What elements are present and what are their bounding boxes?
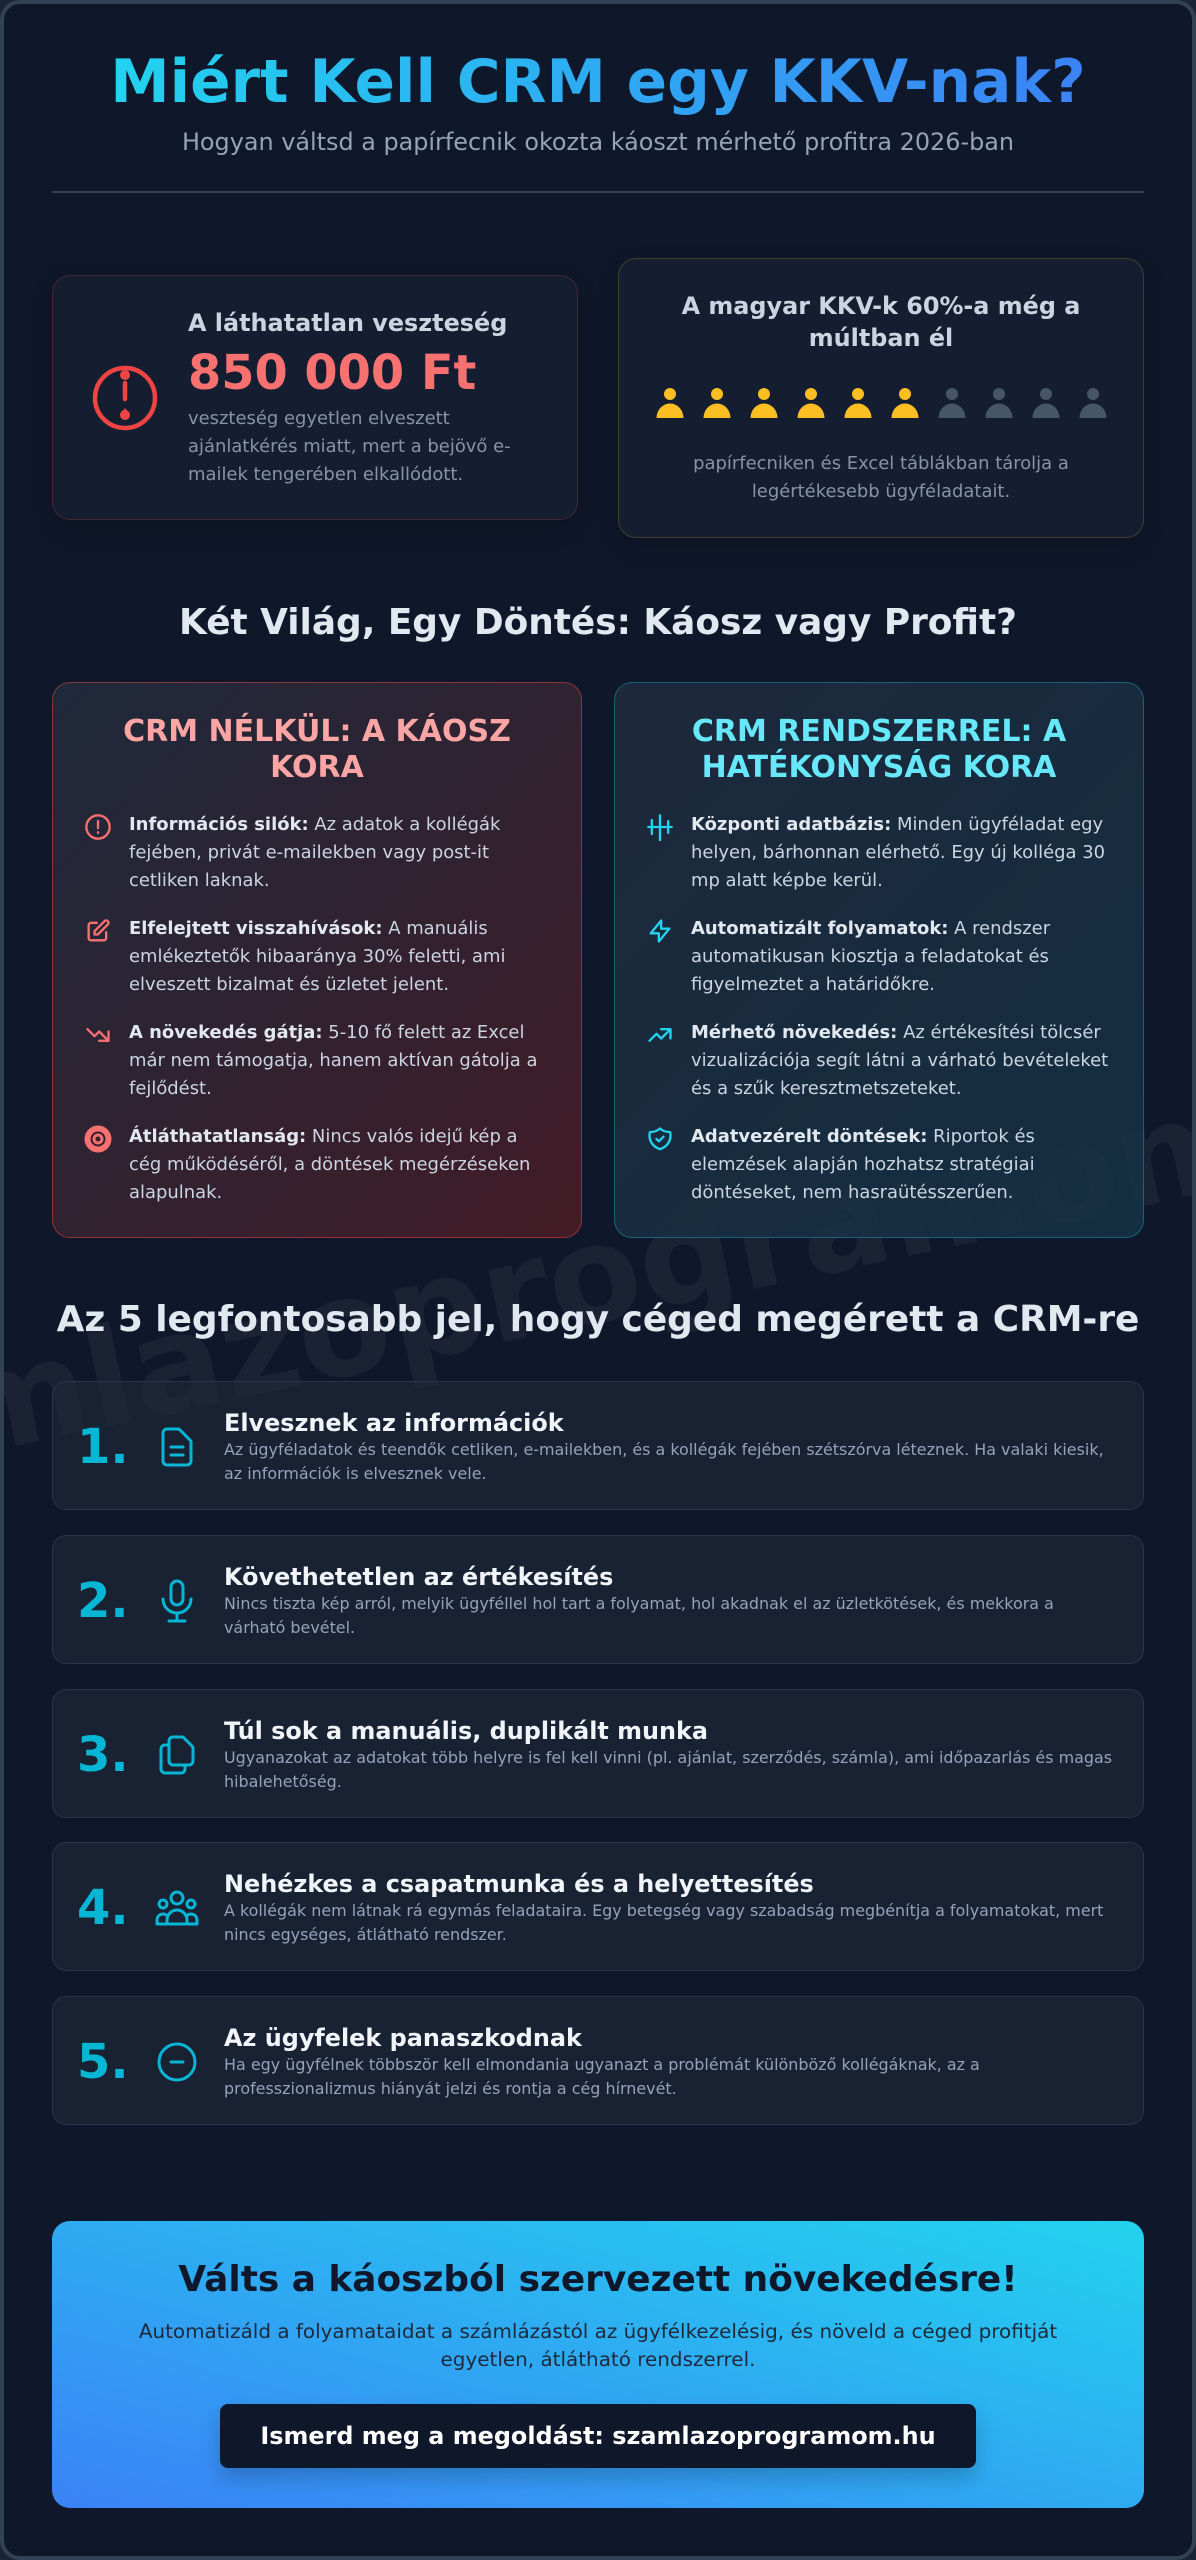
CTA text: Automatizáld a folyamataidat a számlázástól az ügyfélkezelésig, és növeld a céged profitját (139, 2319, 1057, 2343)
stat description (693, 453, 1069, 502)
sign title: Nehézkes a csapatmunka és a helyettesítés (224, 1870, 814, 1898)
item: automation (650, 918, 1050, 995)
panel heading: CRM RENDSZERREL: A (692, 714, 1066, 749)
item: silos (85, 814, 500, 891)
item text (691, 814, 1105, 891)
item text (691, 1126, 1035, 1203)
item text: cég működéséről, a döntések megérzéseken (129, 1154, 530, 1175)
stat description (188, 408, 511, 485)
item text: Információs silók: Az adatok a kollégák (129, 814, 500, 835)
item text: Mérhető növekedés: Az értékesítési tölcsér (691, 1022, 1101, 1043)
item text: figyelmeztet a határidőkre. (691, 974, 935, 995)
item text (691, 1022, 1108, 1099)
sign card 1 (52, 1381, 1144, 1510)
stat description: mailek tengerében elkallódott. (188, 464, 463, 485)
panel heading (123, 712, 511, 785)
item: central database (647, 814, 1105, 891)
sign card 5 (52, 1996, 1144, 2125)
stat heading (682, 292, 1080, 352)
sign description: professzionalizmus hiányát jelzi és rontja a cég hírnevét. (224, 2079, 677, 2098)
sign description: Ugyanazokat az adatokat több helyre is fel kell vinni (pl. ajánlat, szerződés, számla), ami időpazarlás és magas (224, 1748, 1112, 1767)
icon: microphone (162, 1580, 192, 1622)
sign description (224, 1748, 1112, 1791)
item text: Elfelejtett visszahívások: A manuális (129, 918, 488, 939)
stat description: ajánlatkérés miatt, mert a bejövő e- (188, 436, 511, 457)
section heading: five signs: Az 5 legfontosabb jel, hogy céged megérett a CRM-re (57, 1299, 1139, 1340)
item: measurable growth (648, 1022, 1108, 1099)
CTA heading: Válts a káoszból szervezett növekedésre! (178, 2259, 1018, 2300)
icon: team (156, 1890, 198, 1926)
item text (129, 1126, 530, 1203)
item text (129, 918, 506, 995)
icon: exclamation circle (85, 814, 111, 840)
stat value: 850 000 Ft (188, 346, 476, 401)
sign description (224, 1594, 1054, 1637)
item text: fejlődést. (129, 1078, 212, 1099)
item text: elemzések alapján hozhatsz stratégiai (691, 1154, 1035, 1175)
icon: minus circle (152, 2038, 200, 2086)
sign description: várható bevétel. (224, 1618, 355, 1637)
item text: Adatvezérelt döntések: Riportok és (691, 1126, 1035, 1147)
icon: target (84, 1126, 112, 1152)
icon: pencil square (88, 919, 110, 942)
item text: helyen, bárhonnan elérhető. Egy új kolléga 30 (691, 842, 1105, 863)
sign card 4 (52, 1842, 1144, 1971)
sign description: az információk is elvesznek vele. (224, 1464, 487, 1483)
sign description: Ha egy ügyfélnek többször kell elmondania ugyanazt a problémát különböző kollégáknak, az a (224, 2055, 980, 2074)
number: 3. (77, 1727, 129, 1783)
CTA button (220, 2404, 976, 2468)
sign description: hibalehetőség. (224, 1772, 342, 1791)
item text: mp alatt képbe kerül. (691, 870, 883, 891)
item text: Központi adatbázis: Minden ügyféladat egy (691, 814, 1103, 835)
stat heading: múltban él (809, 324, 953, 352)
stat description: legértékesebb ügyféladatait. (752, 481, 1010, 502)
icon: duplicate (160, 1736, 194, 1774)
title: Miért Kell CRM egy KKV-nak? (110, 48, 1086, 117)
item text: A növekedés gátja: 5-10 fő felett az Excel (129, 1022, 524, 1043)
item: data driven decisions (648, 1126, 1035, 1203)
icon: shield check (648, 1127, 672, 1150)
panel heading: HATÉKONYSÁG KORA (702, 750, 1056, 785)
icon: trending down (86, 1028, 110, 1042)
item: forgotten callbacks (88, 918, 506, 995)
panel heading (692, 714, 1066, 785)
number: 1. (77, 1419, 129, 1475)
item text: elveszett bizalmat és üzletet jelent. (129, 974, 449, 995)
item text: alapulnak. (129, 1182, 222, 1203)
sign card 2 (52, 1535, 1144, 1664)
item: opacity (84, 1126, 530, 1203)
section heading: two worlds: Két Világ, Egy Döntés: Káosz vagy Profit? (179, 602, 1017, 643)
sign title: Az ügyfelek panaszkodnak (224, 2024, 582, 2052)
sign description (224, 1901, 1103, 1944)
number: 2. (77, 1573, 129, 1629)
stat description: papírfecniken és Excel táblákban tárolja a (693, 453, 1069, 474)
icon: document (162, 1428, 192, 1466)
icon: alert circle (92, 366, 158, 430)
stat heading: A magyar KKV-k 60%-a még a (682, 292, 1080, 320)
CTA button: Ismerd meg a megoldást: szamlazoprogramom.hu (260, 2422, 936, 2450)
number: 4. (77, 1880, 129, 1936)
sign card 3 (52, 1689, 1144, 1818)
item text: fejében, privát e-mailekben vagy post-it (129, 842, 489, 863)
item text: már nem támogatja, hanem aktívan gátolja a (129, 1050, 537, 1071)
item text (129, 1022, 537, 1099)
pictogram: ten people, six highlighted (656, 388, 1106, 418)
item text (129, 814, 500, 891)
stat heading: A láthatatlan veszteség (188, 309, 507, 337)
sign description: Nincs tiszta kép arról, melyik ügyféllel hol tart a folyamat, hol akadnak el az üzletkötések, és mekkora a (224, 1594, 1054, 1613)
item text: emlékeztetők hibaaránya 30% feletti, ami (129, 946, 506, 967)
panel: without CRM (52, 682, 582, 1238)
CTA text: egyetlen, átlátható rendszerrel. (441, 2347, 755, 2371)
panel heading: KORA (270, 750, 364, 785)
item text: és a szűk keresztmetszeteket. (691, 1078, 962, 1099)
panel: invisible loss stat (52, 275, 578, 520)
sign description: A kollégák nem látnak rá egymás feladataira. Egy betegség vagy szabadság megbénítja a folyamatokat, mert (224, 1901, 1103, 1920)
sign description (224, 1440, 1104, 1483)
sign title: Követhetetlen az értékesítés (224, 1563, 613, 1591)
sign title: Túl sok a manuális, duplikált munka (224, 1717, 708, 1745)
icon: lightning bolt (650, 919, 670, 943)
panel: 60 percent stat (618, 258, 1144, 538)
item text (691, 918, 1050, 995)
item text: Automatizált folyamatok: A rendszer (691, 918, 1050, 939)
sign title: Elvesznek az információk (224, 1409, 564, 1437)
sign description: nincs egységes, átlátható rendszer. (224, 1925, 507, 1944)
subtitle: Hogyan váltsd a papírfecnik okozta káoszt mérhető profitra 2026-ban (182, 128, 1014, 156)
item text: vizualizációja segít látni a várható bevételeket (691, 1050, 1108, 1071)
panel: with CRM (614, 682, 1144, 1238)
icon: trending up (648, 1028, 672, 1042)
panel: call to action (52, 2221, 1144, 2508)
item text: döntéseket, nem hasraütésszerűen. (691, 1182, 1013, 1203)
sign description (224, 2053, 980, 2101)
sign description: Az ügyféladatok és teendők cetliken, e-mailekben, és a kollégák fejében szétszórva léteznek. Ha valaki kiesik, (224, 1440, 1104, 1459)
icon: central hub lines (647, 814, 673, 841)
CTA text (52, 2317, 1144, 2373)
stat description: veszteség egyetlen elveszett (188, 408, 450, 428)
item text: automatikusan kiosztja a feladatokat és (691, 946, 1049, 967)
panel heading: CRM NÉLKÜL: A KÁOSZ (123, 714, 511, 749)
item: growth barrier (86, 1022, 537, 1099)
number: 5. (77, 2034, 129, 2090)
item text: Átláthatatlanság: Nincs valós idejű kép a (129, 1126, 518, 1147)
item text: cetliken laknak. (129, 870, 270, 891)
